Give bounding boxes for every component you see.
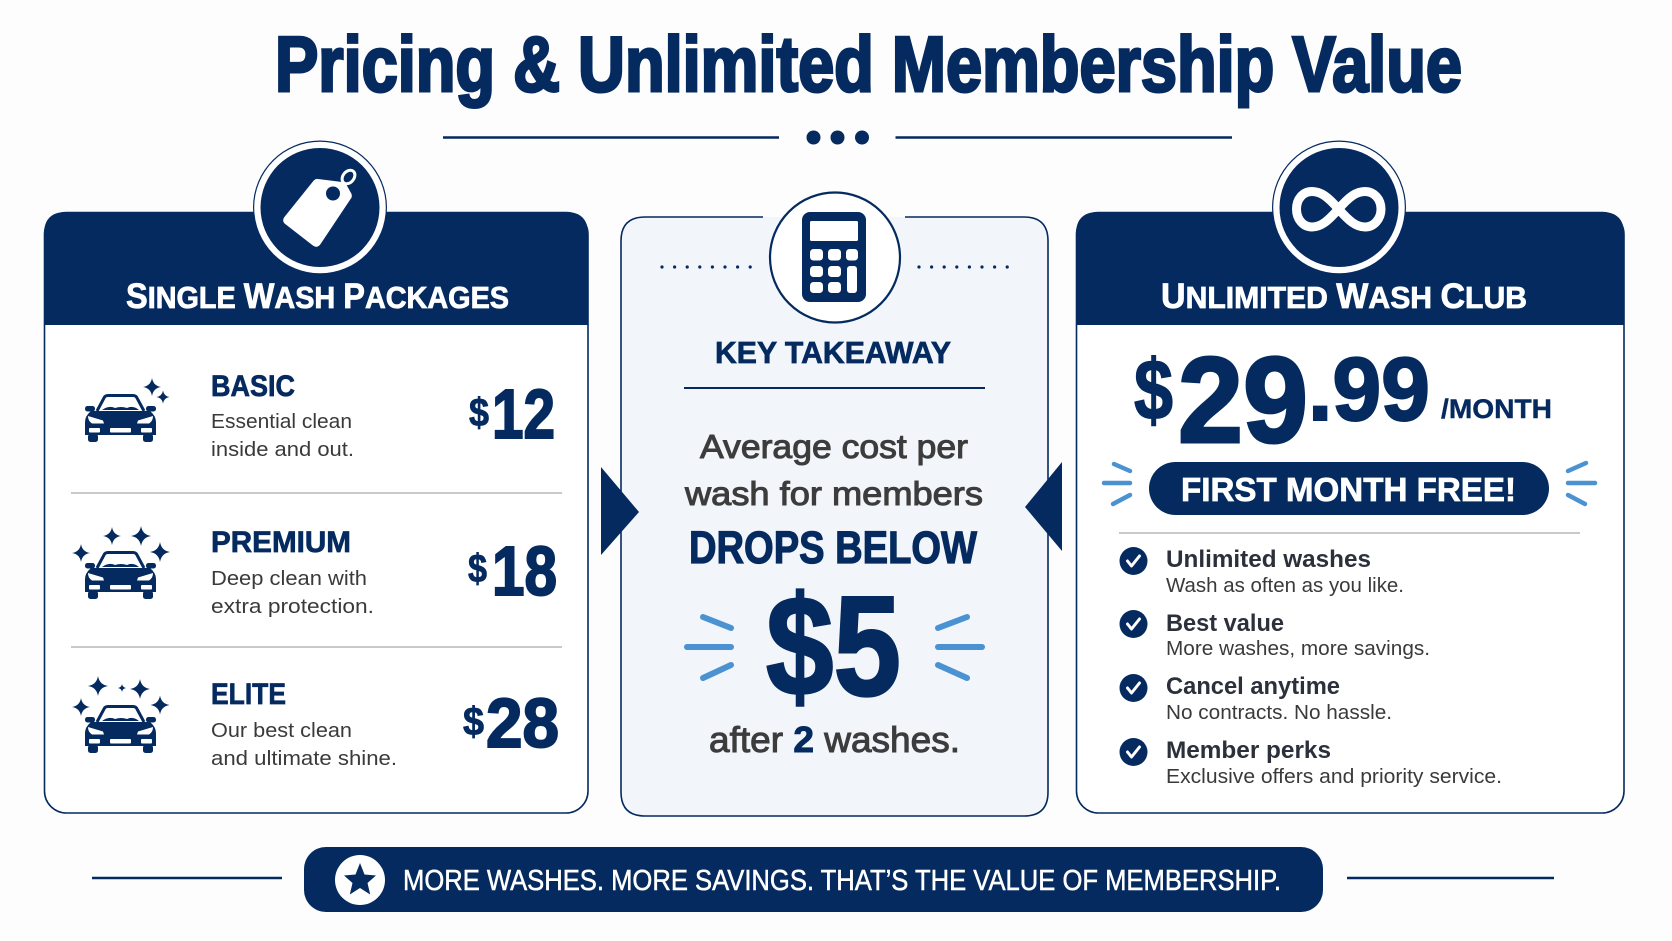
decorative dots left: [662, 265, 754, 269]
basic price: 12: [492, 375, 555, 453]
badge: first month free: FIRST MONTH FREE!: [1181, 471, 1516, 508]
benefit: cancel anytime: [1120, 673, 1392, 724]
elite price: $: [463, 700, 484, 744]
decorative dots right: [919, 265, 1011, 269]
package row: basic: [85, 370, 555, 461]
heading: key takeaway: KEY TAKEAWAY: [715, 336, 951, 370]
icon: star: [335, 855, 385, 905]
monthly price: $: [1134, 343, 1173, 438]
basic description: Essential clean: [211, 410, 352, 433]
premium price: $: [468, 547, 487, 591]
package row: elite: [72, 676, 559, 770]
benefit: best value: [1120, 610, 1430, 660]
benefit: member perks: [1120, 737, 1502, 788]
icon: car with four sparkles: [72, 526, 170, 599]
monthly price: [1134, 332, 1552, 468]
panel header band: [44, 212, 588, 325]
elite description: and ultimate shine.: [211, 747, 397, 770]
benefit: unlimited washes: Wash as often as you like.: [1166, 575, 1404, 597]
monthly price: 29: [1178, 332, 1308, 468]
monthly price: .99: [1308, 340, 1430, 440]
basic name: BASIC: [211, 370, 295, 403]
arrow: left panel to centre: [601, 467, 639, 555]
panel: key takeaway: [621, 192, 1048, 816]
benefit: best value: Best value: [1166, 610, 1284, 637]
basic price: [469, 375, 555, 453]
basic description: inside and out.: [211, 438, 354, 461]
premium description: extra protection.: [211, 595, 374, 618]
footer message: MORE WASHES. MORE SAVINGS. THAT’S THE VALUE OF MEMBERSHIP.: [403, 865, 1281, 897]
benefit: member perks: Member perks: [1166, 737, 1331, 764]
after 2 washes: after 2 washes.: [709, 719, 960, 760]
elite description: Our best clean: [211, 719, 352, 742]
icon: infinity: [1272, 140, 1406, 274]
title divider: [443, 130, 1232, 144]
benefit: unlimited washes: Unlimited washes: [1166, 546, 1371, 573]
benefit: member perks: Exclusive offers and priority service.: [1166, 766, 1502, 788]
arrow: right panel to centre: [1025, 462, 1062, 551]
benefit: cancel anytime: No contracts. No hassle.: [1166, 702, 1392, 724]
elite price: 28: [486, 684, 559, 762]
badge: first month free: [1149, 462, 1549, 515]
panel: unlimited wash club: [1076, 140, 1624, 813]
takeaway sentence: Average cost per: [700, 428, 968, 465]
premium price: 18: [492, 532, 557, 610]
premium price: [468, 532, 557, 610]
title: Pricing & Unlimited Membership Value: [275, 20, 1462, 108]
icon: car with five sparkles: [72, 676, 170, 753]
footer banner: [92, 847, 1554, 912]
benefit: unlimited washes: [1120, 546, 1404, 597]
drops below: DROPS BELOW: [689, 522, 977, 573]
basic price: $: [469, 391, 489, 435]
heading: single wash packages: SINGLE WASH PACKAGES: [126, 277, 509, 316]
icon: calculator: [770, 192, 900, 322]
premium name: PREMIUM: [211, 526, 351, 559]
rays right of badge: [1568, 463, 1595, 504]
rays left: [687, 617, 731, 678]
icon: car with sparkles: [85, 378, 170, 442]
takeaway sentence: wash for members: [684, 475, 983, 512]
rays left of badge: [1104, 464, 1130, 504]
icon: price tag: [253, 140, 387, 274]
premium description: Deep clean with: [211, 567, 367, 590]
heading: unlimited wash club: UNLIMITED WASH CLUB: [1161, 277, 1527, 316]
benefit: cancel anytime: Cancel anytime: [1166, 673, 1340, 700]
rays right: [938, 617, 982, 678]
elite name: ELITE: [211, 678, 286, 711]
package row: premium: [72, 526, 557, 618]
monthly price: /MONTH: [1441, 394, 1552, 424]
big price: $5: $5: [766, 567, 901, 726]
panel: single wash packages: [44, 140, 588, 813]
panel header band: [1076, 212, 1624, 325]
benefit: best value: More washes, more savings.: [1166, 638, 1430, 660]
